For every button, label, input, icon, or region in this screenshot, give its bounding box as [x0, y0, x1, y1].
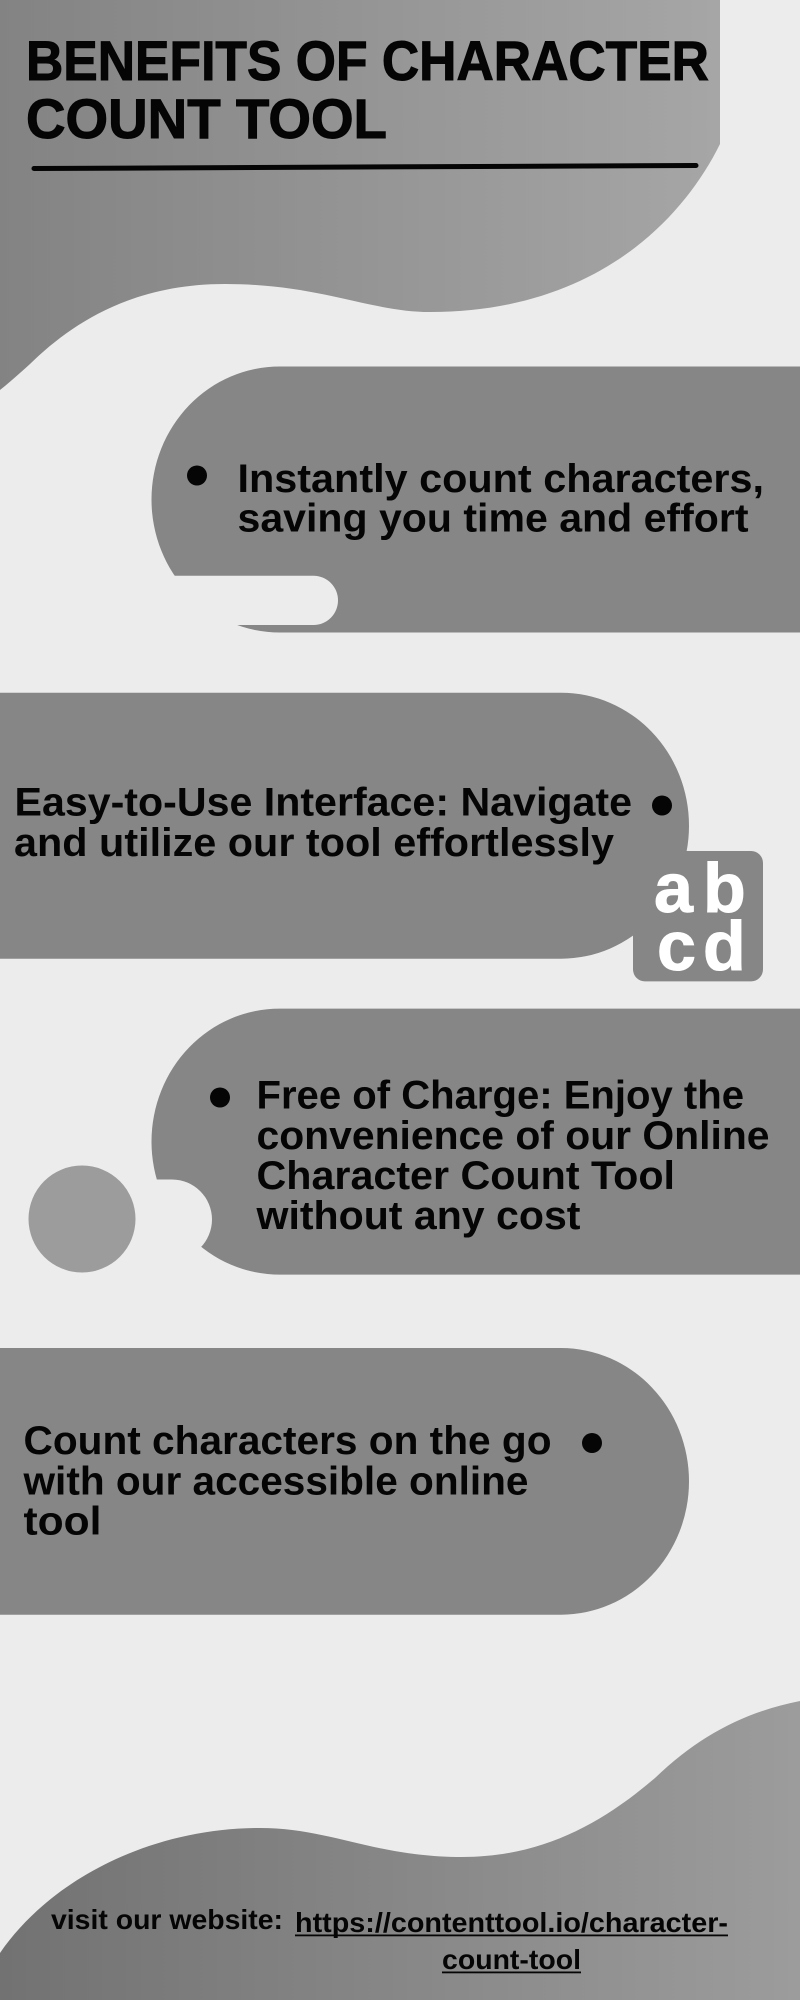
panel text: Count characters on the go [24, 1419, 552, 1463]
title: BENEFITS OF CHARACTER [26, 29, 709, 92]
icon: abcd tile: c [657, 907, 696, 985]
panel text: Instantly count characters, [238, 457, 764, 501]
panel text: and utilize our tool effortlessly [14, 821, 615, 865]
title underline [34, 166, 696, 168]
panel: on the go [0, 1348, 689, 1615]
panel text [238, 457, 764, 540]
panel text: without any cost [255, 1194, 580, 1238]
panel text: with our accessible online [22, 1460, 529, 1504]
panel text: Character Count Tool [256, 1154, 675, 1198]
panel text: Easy-to-Use Interface: Navigate [14, 781, 632, 825]
panel text: saving you time and effort [238, 496, 748, 540]
bullet dot [187, 466, 207, 486]
icon: abcd tile: a [654, 849, 694, 927]
bottom footer blob [0, 1701, 800, 2000]
title: COUNT TOOL [26, 87, 387, 150]
panel: instantly count [100, 366, 800, 633]
panel text: Free of Charge: Enjoy the [256, 1074, 744, 1118]
panel: free of charge [100, 1009, 800, 1275]
footer link [295, 1907, 728, 1975]
top header blob [0, 0, 720, 390]
footer link: https://contenttool.io/character- [295, 1907, 728, 1938]
footer label: visit our website: [51, 1904, 283, 1935]
title [26, 29, 709, 150]
decorative gray circle [28, 1166, 136, 1272]
icon: abcd tile: d [703, 907, 746, 985]
icon: abcd tile: b [703, 849, 746, 927]
panel text [14, 781, 632, 865]
bullet dot [210, 1088, 230, 1108]
bullet dot [652, 796, 672, 816]
panel: easy to use [0, 693, 689, 959]
panel text: convenience of our Online [256, 1114, 770, 1158]
bullet dot [582, 1433, 602, 1453]
panel text: tool [24, 1500, 102, 1544]
footer link: count-tool [442, 1944, 581, 1975]
icon: abcd tile [633, 849, 763, 985]
panel text [22, 1419, 552, 1544]
panel text [255, 1074, 769, 1238]
